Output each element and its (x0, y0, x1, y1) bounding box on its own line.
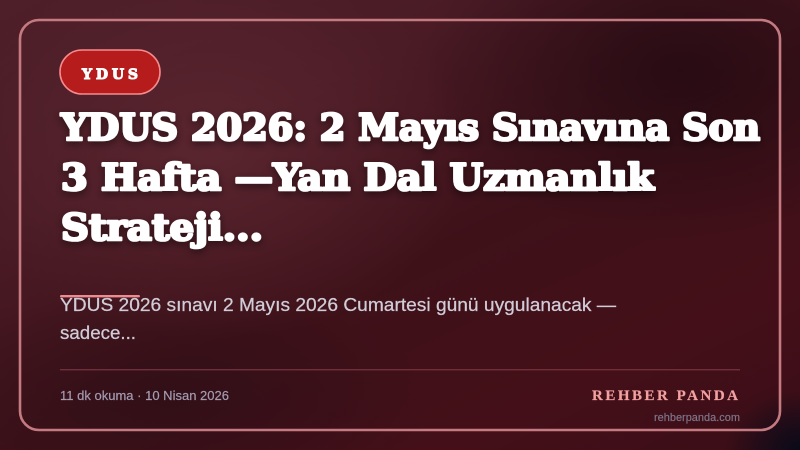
description: YDUS 2026 sınavı 2 Mayıs 2026 Cumartesi günü uygulanacak — (60, 295, 616, 315)
title: YDUS 2026: 2 Mayıs Sınavına Son (60, 107, 760, 149)
reading time and date: 11 dk okuma · 10 Nisan 2026 (60, 388, 229, 403)
title: 3 Hafta —Yan Dal Uzmanlık (61, 157, 655, 199)
description: sadece... (60, 323, 136, 343)
title: Strateji... (61, 207, 263, 249)
accent bar (60, 295, 140, 297)
title (60, 107, 760, 249)
website: rehberpanda.com (654, 412, 740, 424)
badge: YDUS (60, 50, 160, 94)
brand name: REHBER PANDA (592, 388, 738, 404)
description (60, 295, 616, 343)
badge: YDUS: YDUS (81, 67, 138, 83)
